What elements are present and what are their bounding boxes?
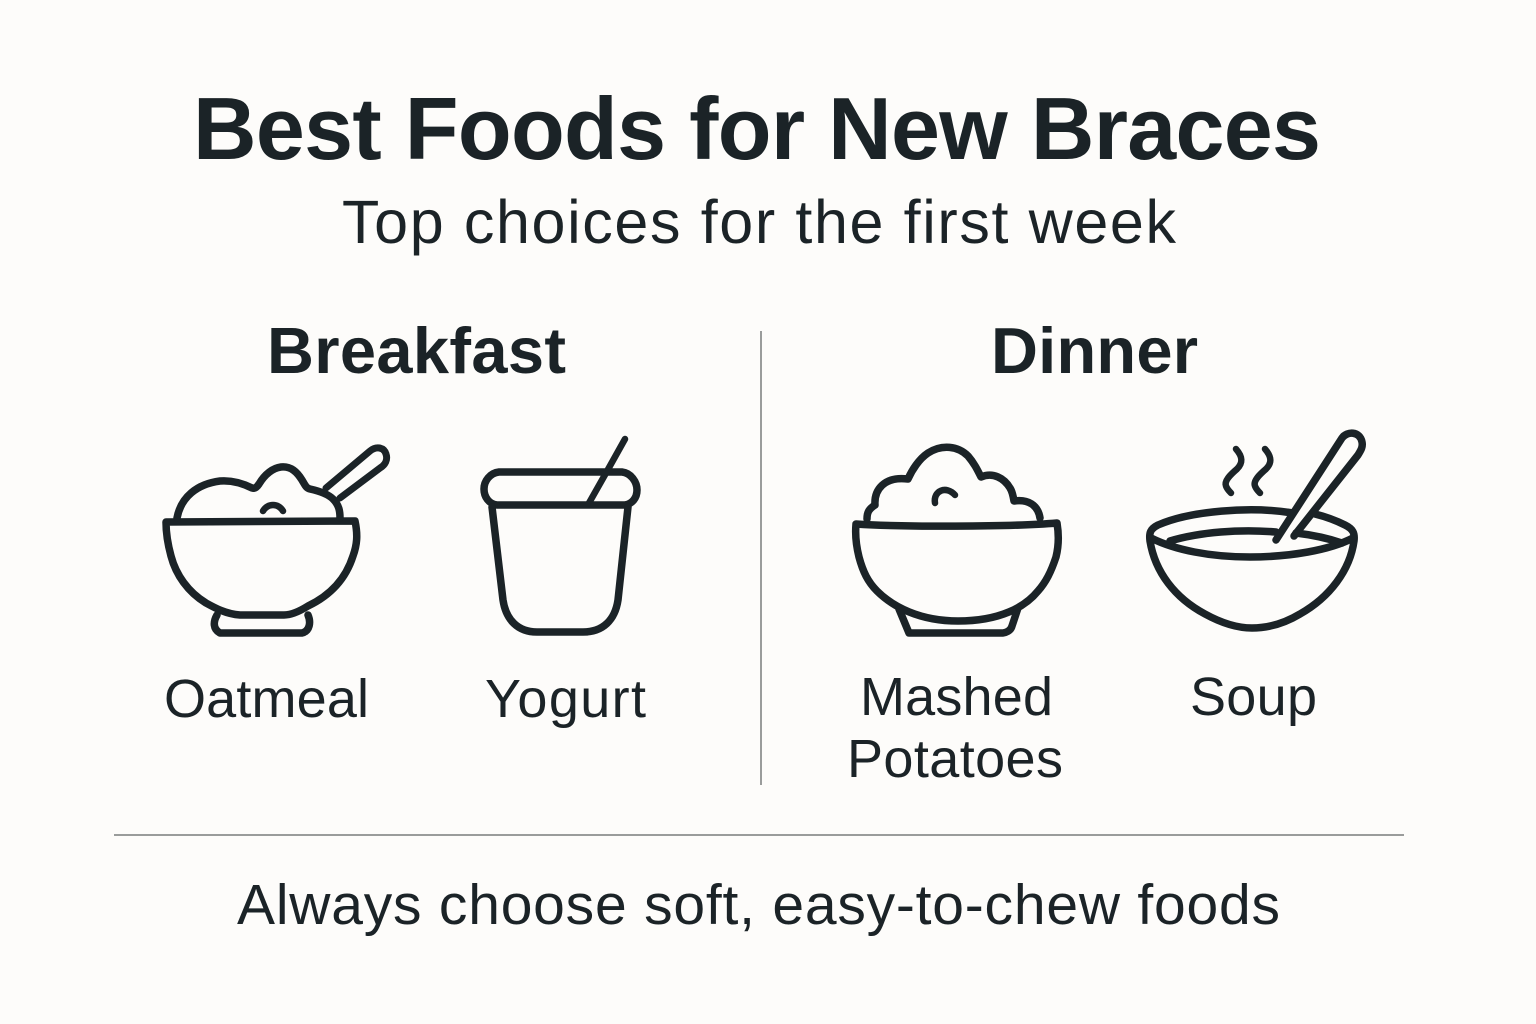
icon: soup bowl with spoon (1150, 433, 1362, 628)
label: Soup: Soup (1190, 667, 1317, 727)
label: Oatmeal: Oatmeal (164, 669, 369, 729)
heading: Breakfast: Breakfast (267, 314, 566, 387)
label: Mashed Potatoes (847, 667, 1063, 789)
title: Best Foods for New Braces (193, 79, 1321, 178)
footer note: Always choose soft, easy-to-chew foods (237, 873, 1280, 937)
icon: oatmeal bowl with spoon (166, 448, 387, 633)
icon: yogurt cup with spoon (484, 439, 637, 632)
icon: mashed potatoes bowl (856, 447, 1058, 633)
label: Mashed Potatoes: Mashed (860, 667, 1053, 727)
label: Yogurt: Yogurt (485, 669, 646, 729)
heading: Dinner: Dinner (991, 314, 1198, 387)
label: Mashed Potatoes: Potatoes (847, 729, 1063, 789)
subtitle: Top choices for the first week (342, 188, 1176, 256)
